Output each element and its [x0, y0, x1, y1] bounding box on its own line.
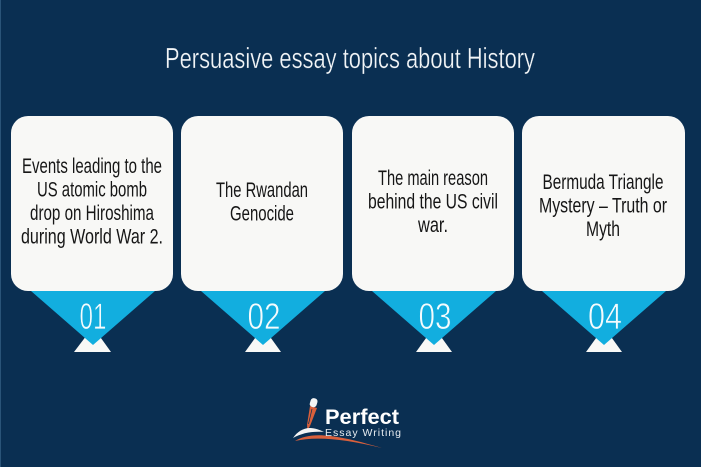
pointer: blue triangle [372, 291, 496, 345]
card text: Myth [586, 218, 620, 241]
title: Persuasive essay topics about History [165, 43, 535, 75]
card text: drop on Hiroshima [30, 202, 154, 225]
card [11, 116, 173, 291]
logo tagline: Essay Writing [325, 427, 401, 439]
logo wordmark: Perfect [325, 406, 399, 429]
card [352, 116, 514, 291]
card text: The main reason [378, 167, 488, 190]
card [181, 116, 343, 291]
number: 04 [588, 296, 622, 337]
pointer base: white triangle [245, 327, 281, 352]
number: 01 [80, 296, 106, 337]
number: 02 [248, 296, 280, 337]
logo: Perfect Essay Writing [293, 397, 401, 448]
card text: The Rwandan [216, 179, 308, 202]
pointer base: white triangle [74, 327, 111, 352]
icon: pencil [307, 397, 318, 430]
pointer base: white triangle [416, 327, 452, 352]
pointer base: white triangle [586, 327, 622, 352]
pointer: blue triangle [31, 291, 155, 345]
panel: topic 03 [352, 116, 514, 352]
panel: topic 01 [11, 116, 173, 352]
card text: Events leading to the [22, 155, 162, 178]
card text: war. [417, 214, 448, 237]
panel: topic 02 [181, 116, 343, 352]
icon: swoosh [295, 435, 382, 448]
panel: topic 04 [522, 116, 685, 352]
pointer: blue triangle [201, 291, 325, 345]
card [522, 116, 685, 291]
card text: behind the US civil [368, 190, 498, 214]
card text: US atomic bomb [37, 178, 147, 202]
card text: during World War 2. [21, 226, 163, 248]
number: 03 [418, 296, 452, 337]
icon: open book [293, 428, 324, 438]
pointer: blue triangle [542, 291, 666, 345]
card text: Genocide [230, 202, 294, 226]
